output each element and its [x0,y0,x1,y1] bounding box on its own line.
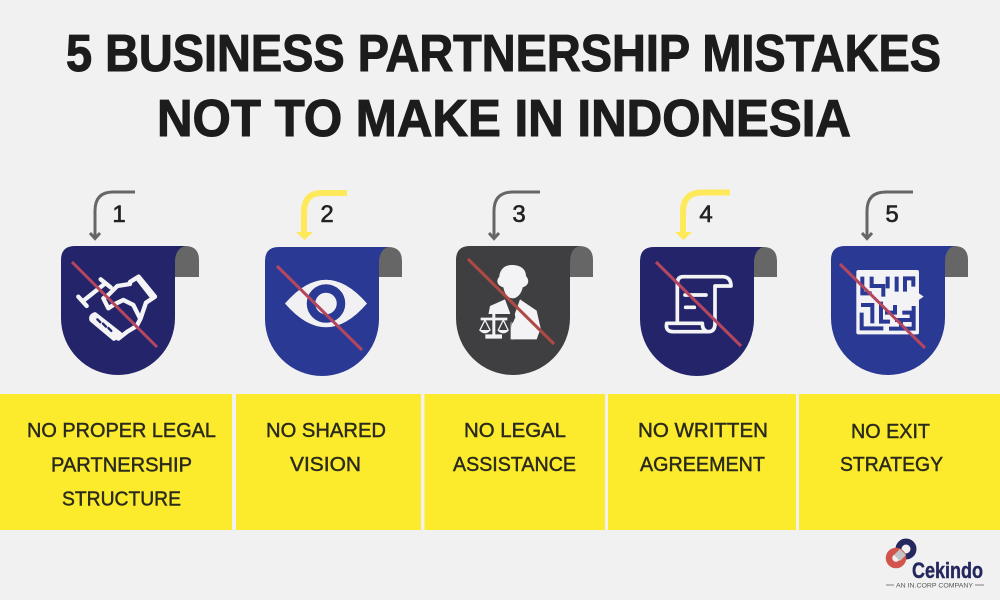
logo: Cekindo [886,542,984,590]
label 5: NO EXIT [851,420,930,443]
label 4: AGREEMENT [640,453,765,476]
slash 1 [72,262,157,347]
icon: eye [285,280,367,327]
label 2: VISION [290,453,361,476]
arrow 4 [675,192,730,240]
shield 3 [456,246,593,375]
label 4: NO WRITTEN [638,419,768,442]
slash 3 [468,259,554,344]
logo: Cekindo: AN IN.CORP COMPANY [896,582,974,590]
label 1 [27,419,216,510]
shield 4 [640,247,777,376]
shield 2 [265,247,402,376]
slash 4 [656,262,741,346]
label 2 [266,419,386,476]
logo: Cekindo: Cekindo [912,558,983,583]
label 4 [638,419,768,476]
shield 5 [831,246,968,375]
step 5: exit strategy [831,192,968,375]
panel: no shared vision [236,394,421,530]
number 5: 5 [885,201,899,228]
number 2: 2 [320,201,334,228]
shield 1 [61,246,199,375]
label 3: ASSISTANCE [453,453,576,476]
slash 5 [840,264,925,348]
title [66,25,941,148]
label 1: STRUCTURE [62,488,181,510]
title: NOT TO MAKE IN INDONESIA [157,90,851,148]
step 1: legal structure [61,192,199,375]
step 4: written agreement [640,192,777,376]
slash 2 [277,266,362,350]
arrow 1 [90,192,135,238]
label 2: NO SHARED [266,419,386,442]
label 1: NO PROPER LEGAL [27,419,216,442]
step 3: legal assistance [456,192,593,375]
label 3: NO LEGAL [464,419,566,442]
number 1: 1 [112,201,126,228]
step 2: shared vision [265,193,402,376]
icon: handshake [78,277,155,339]
label 3 [453,419,576,476]
panel: no proper legal partnership structure [0,394,232,530]
arrow 3 [489,192,540,238]
panel: no legal assistance [424,394,605,530]
label 5: STRATEGY [840,453,943,476]
icon: scroll [666,277,731,332]
number 3: 3 [512,201,526,228]
arrow 2 [296,193,347,240]
panel: no exit strategy [799,394,1000,530]
icon: lawyer with scales [477,265,541,342]
number 4: 4 [699,201,713,228]
label 1: PARTNERSHIP [51,454,192,476]
icon: maze [856,270,924,334]
label 5 [840,420,943,476]
arrow 5 [862,192,913,238]
panel: no written agreement [608,394,796,530]
